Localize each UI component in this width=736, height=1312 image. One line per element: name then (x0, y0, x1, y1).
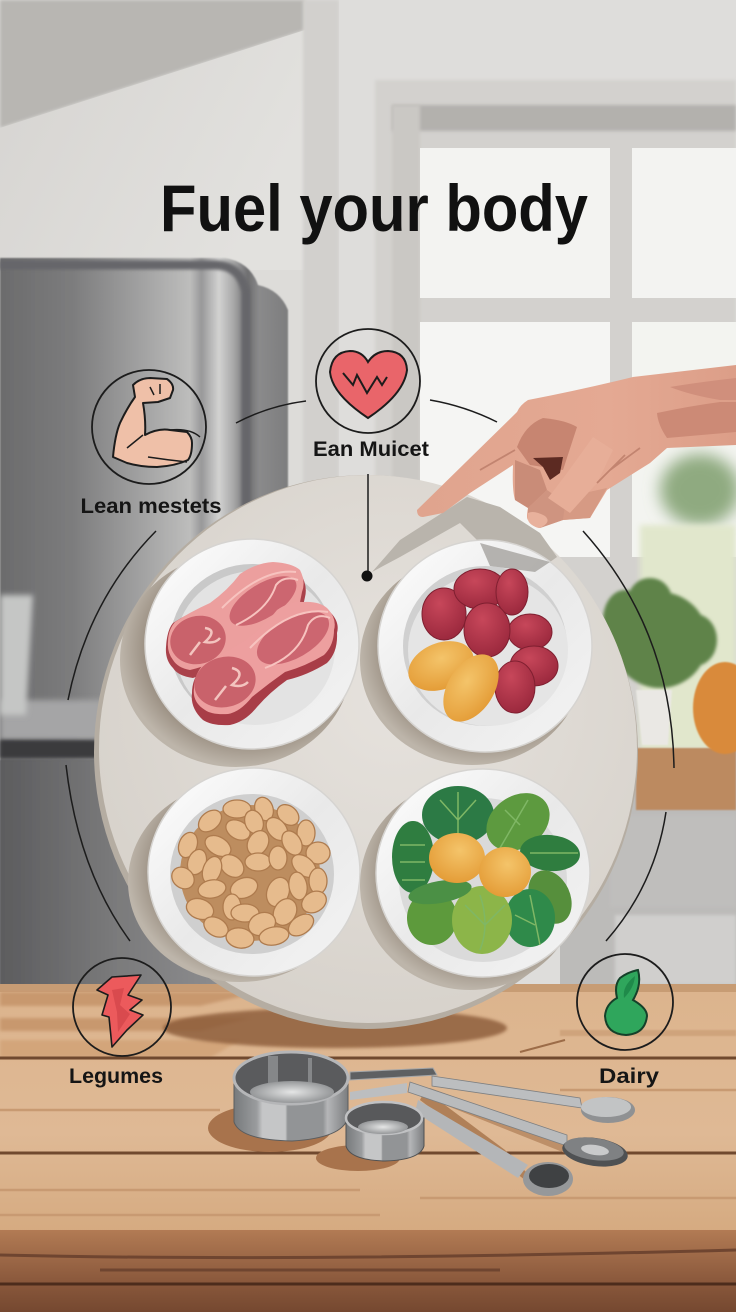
icon: heart with pulse (316, 329, 420, 433)
plate: greens and yellow fruit (360, 769, 590, 990)
plate: beans (128, 768, 360, 982)
plate: lean meat (120, 539, 359, 767)
measuring cups and spoons (208, 1052, 635, 1196)
hand pointing at plate (417, 365, 736, 528)
icon: flexed muscle (92, 370, 206, 484)
icon: lightning bolt (73, 958, 171, 1056)
large serving plate (94, 475, 638, 1048)
table top (0, 984, 736, 1312)
label: Lean mestets: Lean mestets (80, 495, 222, 518)
arc connectors (66, 400, 674, 941)
title: Fuel your body (160, 171, 588, 245)
label: Ean Muicet: Ean Muicet (313, 438, 429, 461)
food: steak two (189, 601, 338, 725)
label: Dairy: Dairy (599, 1065, 659, 1088)
label: Legumes: Legumes (69, 1065, 163, 1088)
food: steak one (165, 562, 306, 678)
plate: red and yellow fruit (360, 540, 592, 765)
icon: green drop (577, 954, 673, 1050)
